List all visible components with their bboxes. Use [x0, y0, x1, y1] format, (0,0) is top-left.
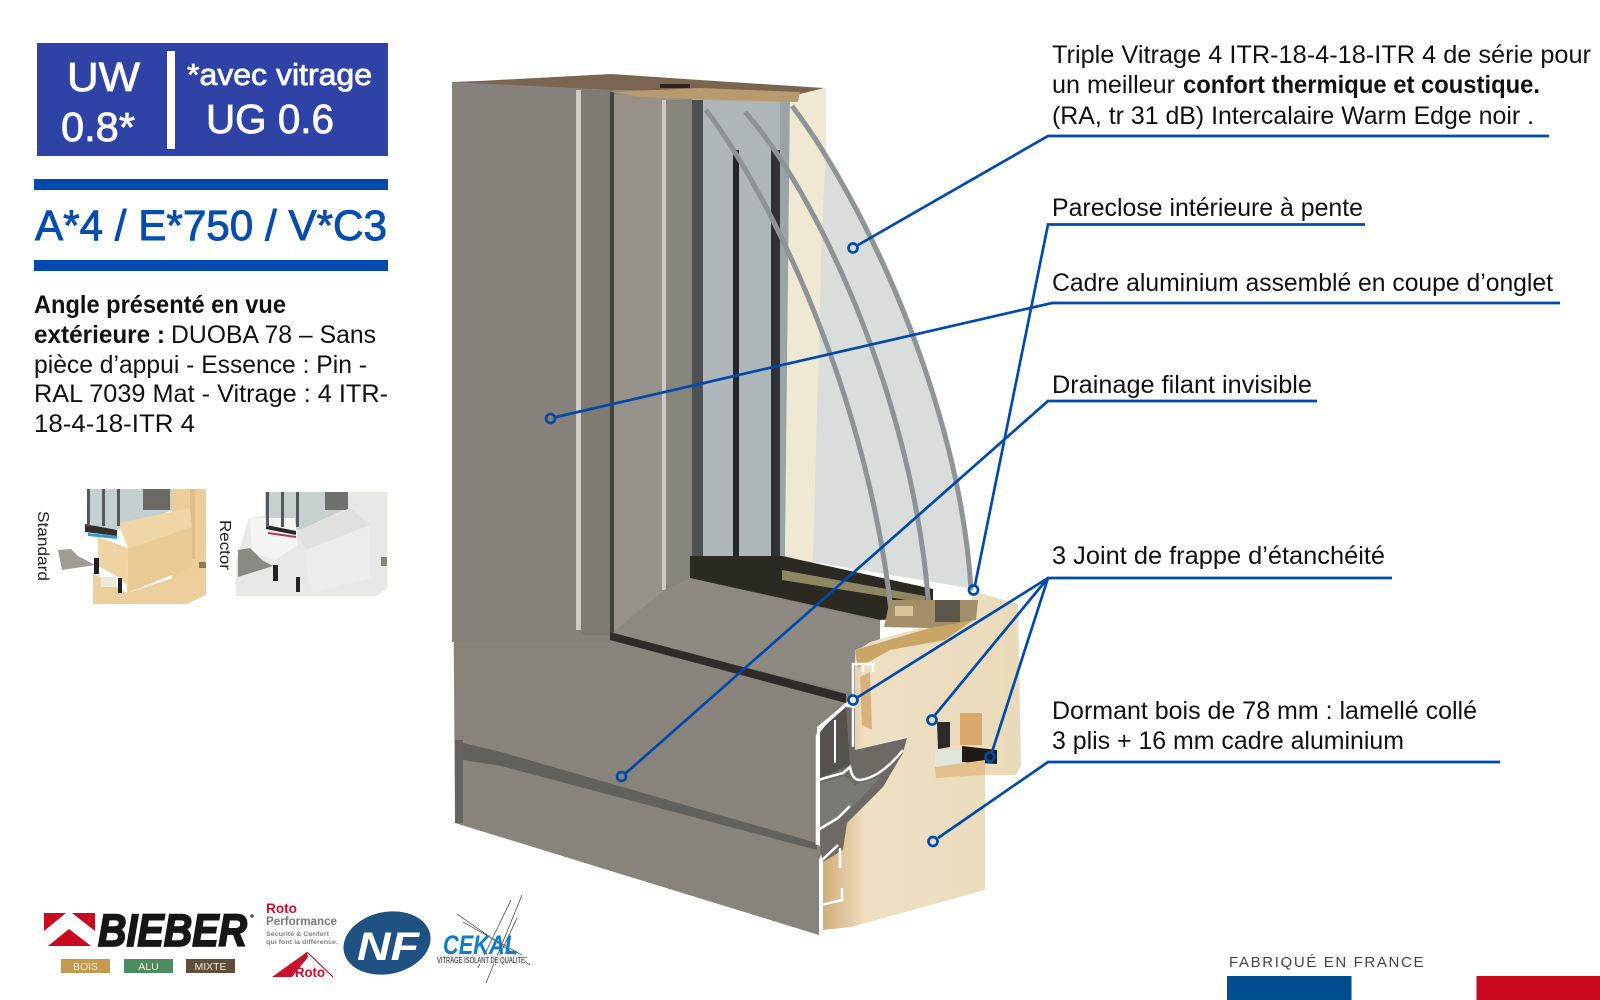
text block: product description: 18-4-18-ITR 4 — [34, 410, 195, 438]
heading: air water wind rating: A*4 / E*750 / V*C3 — [35, 202, 387, 250]
seal slit — [610, 632, 846, 703]
text block: product description: extérieure : — [34, 321, 165, 349]
badge: made in France — [1227, 954, 1600, 1000]
callout: three weather seals — [848, 542, 1392, 762]
callout: triple glazing: un meilleur — [1052, 71, 1175, 99]
label: Standard: Standard — [34, 511, 51, 581]
logo: Bieber: BOIS — [73, 961, 98, 973]
callout: triple glazing: (RA, tr 31 dB) Intercalaire Warm Edge noir . — [1052, 102, 1534, 130]
text block: product description: RAL 7039 Mat - Vitrage : 4 ITR- — [34, 380, 388, 408]
logo: Roto Performance: Sécurité & Confort — [266, 931, 329, 938]
sill dark band — [690, 556, 933, 620]
logo: NF mark: NF — [357, 925, 421, 969]
callout: triple glazing — [848, 41, 1591, 252]
glazing units — [692, 96, 792, 566]
logo: Roto Performance: qui font la différence. — [266, 939, 338, 946]
logo: Bieber — [44, 905, 254, 973]
callout: triple glazing: confort thermique et coustique. — [1183, 71, 1540, 99]
logo: Roto Performance: Performance — [266, 914, 337, 928]
text block: product description: pièce d’appui - Essence : Pin - — [34, 351, 367, 379]
figure: Standard section thumbnail — [34, 489, 206, 604]
callout: interior glazing bead: Pareclose intérieure à pente — [1052, 194, 1363, 222]
logo: Bieber: ALU — [138, 961, 159, 973]
logo: Bieber: MIXTE — [194, 961, 227, 973]
callout: mitred aluminium frame — [546, 269, 1560, 423]
panel: UW performance badge: *avec vitrage — [187, 57, 372, 92]
logo: Cekal: CEKAL — [443, 930, 518, 960]
logo: Cekal: VITRAGE ISOLANT DE QUALITE — [437, 955, 525, 965]
timber section — [823, 592, 1021, 930]
three curved glass panes — [706, 110, 892, 620]
gaskets and rebate — [960, 713, 982, 745]
logo: Bieber: BIEBER — [98, 905, 247, 956]
callout: three weather seals: 3 Joint de frappe d’étanchéité — [1052, 542, 1385, 570]
thermal break profile — [820, 707, 907, 862]
badge: made in France: FABRIQUÉ EN FRANCE — [1229, 954, 1424, 971]
callout: triple glazing: Triple Vitrage 4 ITR-18-4-18-ITR 4 de série pour — [1052, 41, 1591, 69]
figure: Rector section thumbnail — [216, 492, 387, 596]
callout: invisible drainage — [617, 371, 1317, 781]
sill bead — [610, 578, 880, 693]
callout: interior glazing bead — [969, 194, 1365, 594]
panel: UW performance badge: UG 0.6 — [206, 96, 334, 142]
callout: timber frame: 3 plis + 16 mm cadre aluminium — [1052, 727, 1404, 755]
callout: invisible drainage: Drainage filant invisible — [1052, 371, 1312, 399]
text block: product description: Angle présenté en vue — [34, 291, 286, 319]
aluminium frame L shape — [452, 82, 880, 935]
panel: UW performance badge: UW — [67, 54, 140, 100]
callout: timber frame — [928, 697, 1500, 846]
logo: NF mark — [338, 904, 436, 982]
label: Rector: Rector — [216, 520, 233, 570]
text block: product description: DUOBA 78 – Sans — [171, 321, 376, 349]
drain groove — [463, 743, 817, 850]
panel: UW performance badge: 0.8* — [61, 104, 135, 150]
logo: Cekal — [437, 895, 530, 983]
illustration: window corner cross-section — [452, 74, 1021, 935]
top timber end grain — [452, 74, 824, 94]
text block: product description — [34, 291, 388, 438]
heading: air water wind rating — [34, 179, 388, 271]
cream timber reveal — [785, 88, 826, 565]
callout: mitred aluminium frame: Cadre aluminium assemblé en coupe d’onglet — [1052, 269, 1553, 297]
logo: Roto Performance — [266, 901, 338, 980]
panel: UW performance badge — [37, 43, 388, 156]
callout: timber frame: Dormant bois de 78 mm : lamellé collé — [1052, 697, 1477, 725]
logo: Roto Performance: Roto — [295, 965, 325, 980]
logo: Roto Performance: Roto — [266, 901, 297, 916]
pale curved glass — [785, 106, 969, 588]
